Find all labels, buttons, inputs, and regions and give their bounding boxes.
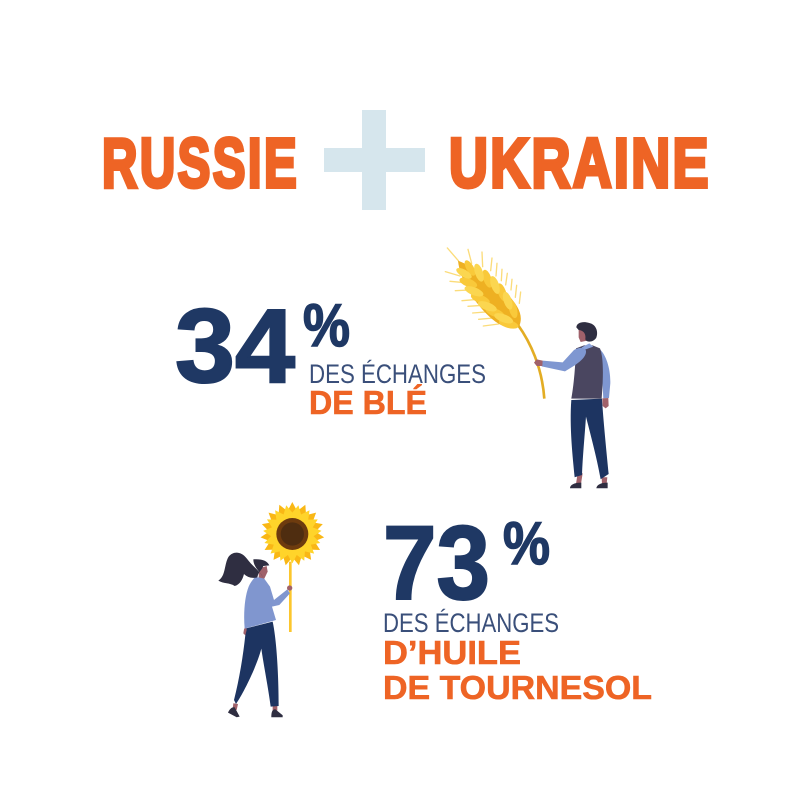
percent sign: % [303,292,350,359]
label: des échanges: DES ÉCHANGES [309,359,486,389]
illustration: woman holding sunflower [218,502,325,717]
label: d'huile de tournesol [383,634,652,706]
number: 73: 73 [383,505,490,622]
label: d'huile de tournesol: D’HUILE [383,634,521,671]
title: Russie + Ukraine [102,110,711,210]
statistic: 34% wheat [175,288,486,421]
statistic: 73% sunflower oil [383,505,652,706]
percent sign: % [503,510,550,577]
icon: plus sign [324,110,425,210]
figure: woman [218,553,292,717]
number: 34: 34 [175,288,295,405]
label: de blé: DE BLÉ [309,384,427,421]
icon: wheat ear [445,248,544,399]
figure: man [534,322,610,488]
label: d'huile de tournesol: DE TOURNESOL [383,669,652,706]
label: des échanges: DES ÉCHANGES [383,608,559,638]
icon: sunflower [260,502,325,632]
heading: Ukraine: UKRAINE [449,124,711,203]
illustration: man holding wheat [445,248,610,488]
heading: Russie: RUSSIE [102,123,299,202]
